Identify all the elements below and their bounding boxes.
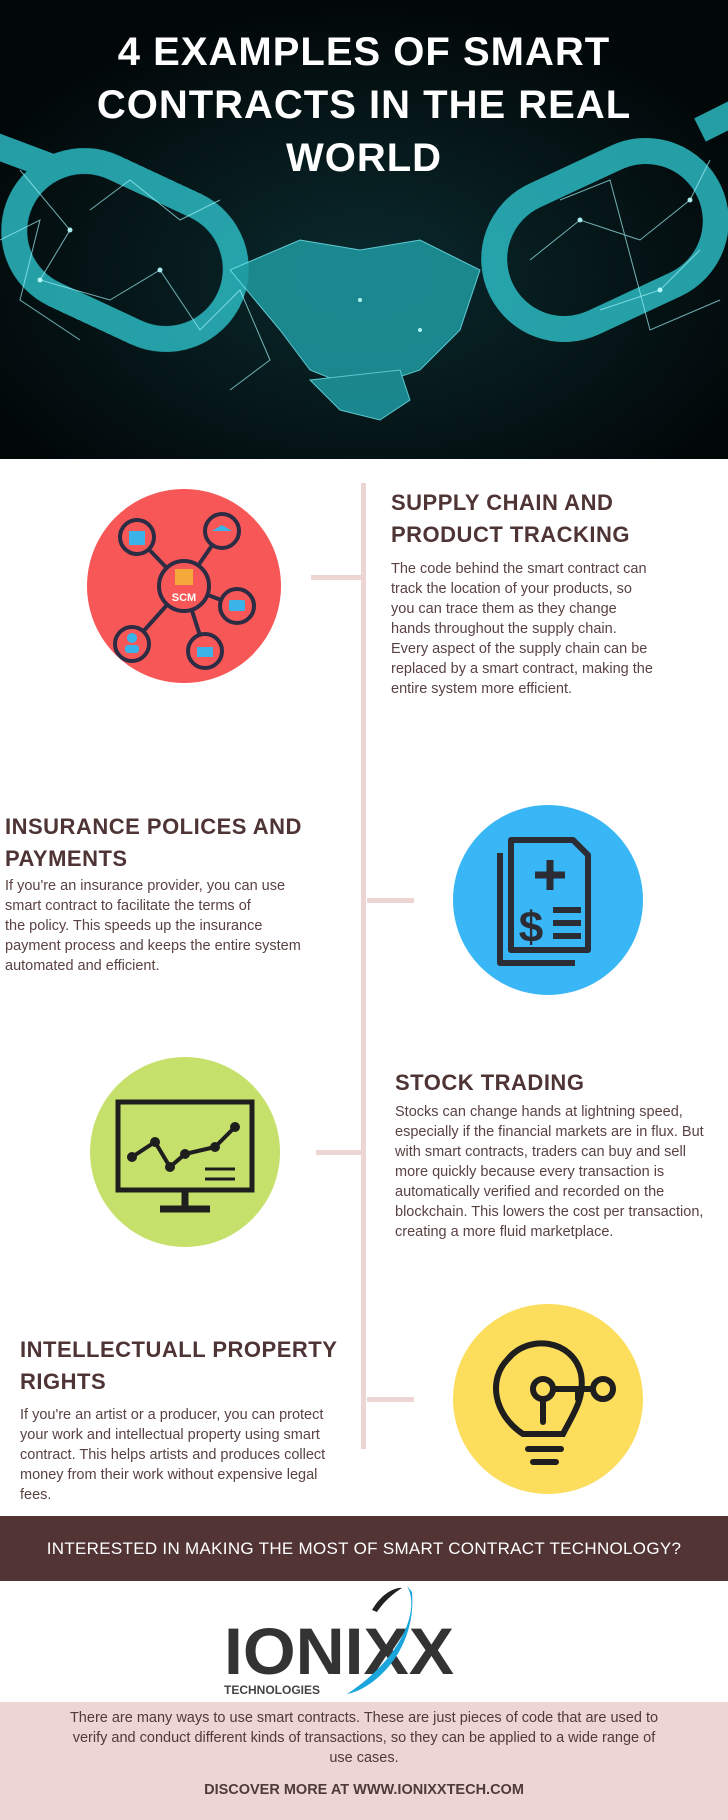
text: IP: contract. This helps artists and produces collect xyxy=(20,1447,325,1463)
banner: call to action xyxy=(0,1516,728,1581)
icon: SCM network: SCM xyxy=(172,592,196,604)
text: supply chain: entire system more efficient. xyxy=(391,681,572,697)
text: stock trading: especially if the financial markets are in flux. But xyxy=(395,1124,704,1140)
panel: stock trading xyxy=(90,1057,704,1247)
text: supply chain: Every aspect of the supply chain can be xyxy=(391,641,647,657)
timeline vertical line xyxy=(361,483,366,1449)
text: stock trading: creating a more fluid marketplace. xyxy=(395,1224,613,1240)
connector xyxy=(311,575,361,580)
footer text xyxy=(70,1710,658,1766)
panel: intellectual property xyxy=(20,1304,643,1503)
text: supply chain xyxy=(391,561,653,697)
icon: SCM network xyxy=(87,489,281,683)
footer text: use cases. xyxy=(329,1750,399,1766)
text: insurance: the policy. This speeds up the insurance xyxy=(5,918,262,934)
panel: insurance xyxy=(5,805,643,995)
text: stock trading: blockchain. This lowers the cost per transaction, xyxy=(395,1204,703,1220)
panel: supply chain xyxy=(87,489,653,697)
text: insurance: If you're an insurance provider, you can use xyxy=(5,878,285,894)
text: IP xyxy=(20,1407,326,1503)
footer xyxy=(0,1702,728,1820)
icon: policy document xyxy=(453,805,643,995)
heading: supply chain xyxy=(391,490,630,547)
heading: IP: INTELLECTUALL PROPERTY xyxy=(20,1337,337,1362)
icon: monitor chart xyxy=(90,1057,280,1247)
banner: call to action: INTERESTED IN MAKING THE MOST OF SMART CONTRACT TECHNOLOGY? xyxy=(47,1539,681,1558)
logo: IONIXX Technologies: TECHNOLOGIES xyxy=(224,1683,320,1697)
text: stock trading xyxy=(395,1104,704,1240)
title xyxy=(44,30,631,283)
connector xyxy=(367,898,414,903)
title: CONTRACTS IN THE REAL xyxy=(97,83,631,127)
icon: lightbulb with key xyxy=(453,1304,643,1494)
heading: IP xyxy=(20,1337,337,1394)
heading: insurance: PAYMENTS xyxy=(5,846,128,871)
text: supply chain: you can trace them as they change xyxy=(391,601,617,617)
logo: IONIXX Technologies xyxy=(224,1586,454,1697)
logo: IONIXX Technologies: IONIXX xyxy=(224,1614,454,1688)
text: stock trading: more quickly because every transaction is xyxy=(395,1164,664,1180)
heading: IP: RIGHTS xyxy=(20,1369,106,1394)
text: stock trading: with smart contracts, traders can buy and sell xyxy=(395,1144,686,1160)
handshake xyxy=(230,240,480,420)
header banner xyxy=(0,0,728,459)
heading: supply chain: SUPPLY CHAIN AND xyxy=(391,490,613,515)
heading: supply chain: PRODUCT TRACKING xyxy=(391,522,630,547)
connector xyxy=(367,1397,414,1402)
footer link: DISCOVER MORE AT WWW.IONIXXTECH.COM xyxy=(204,1782,524,1798)
text: supply chain: hands throughout the supply chain. xyxy=(391,621,617,637)
text: stock trading: automatically verified and recorded on the xyxy=(395,1184,664,1200)
text: insurance: automated and efficient. xyxy=(5,958,160,974)
title: 4 EXAMPLES OF SMART xyxy=(118,30,610,74)
connector xyxy=(316,1150,362,1155)
footer text: There are many ways to use smart contracts. These are just pieces of code that are used to xyxy=(70,1710,658,1726)
text: IP: money from their work without expensive legal xyxy=(20,1467,317,1483)
text: IP: your work and intellectual property using smart xyxy=(20,1427,320,1443)
text: stock trading: Stocks can change hands at lightning speed, xyxy=(395,1104,683,1120)
text: insurance xyxy=(5,878,301,974)
heading: insurance xyxy=(5,814,302,871)
text: supply chain: track the location of your products, so xyxy=(391,581,632,597)
footer text: verify and conduct different kinds of transactions, so they can be applied to a wide range of xyxy=(73,1730,655,1746)
text: supply chain: The code behind the smart contract can xyxy=(391,561,647,577)
text: insurance: payment process and keeps the entire system xyxy=(5,938,301,954)
icon: policy document: $ xyxy=(519,903,543,952)
text: supply chain: replaced by a smart contract, making the xyxy=(391,661,653,677)
text: IP: If you're an artist or a producer, you can protect xyxy=(20,1407,323,1423)
header illustration: network chains and handshake xyxy=(0,58,728,459)
text: IP: fees. xyxy=(20,1487,51,1503)
title: WORLD xyxy=(286,136,442,180)
heading: insurance: INSURANCE POLICES AND xyxy=(5,814,302,839)
heading: stock trading: STOCK TRADING xyxy=(395,1070,584,1095)
text: insurance: smart contract to facilitate the terms of xyxy=(5,898,251,914)
